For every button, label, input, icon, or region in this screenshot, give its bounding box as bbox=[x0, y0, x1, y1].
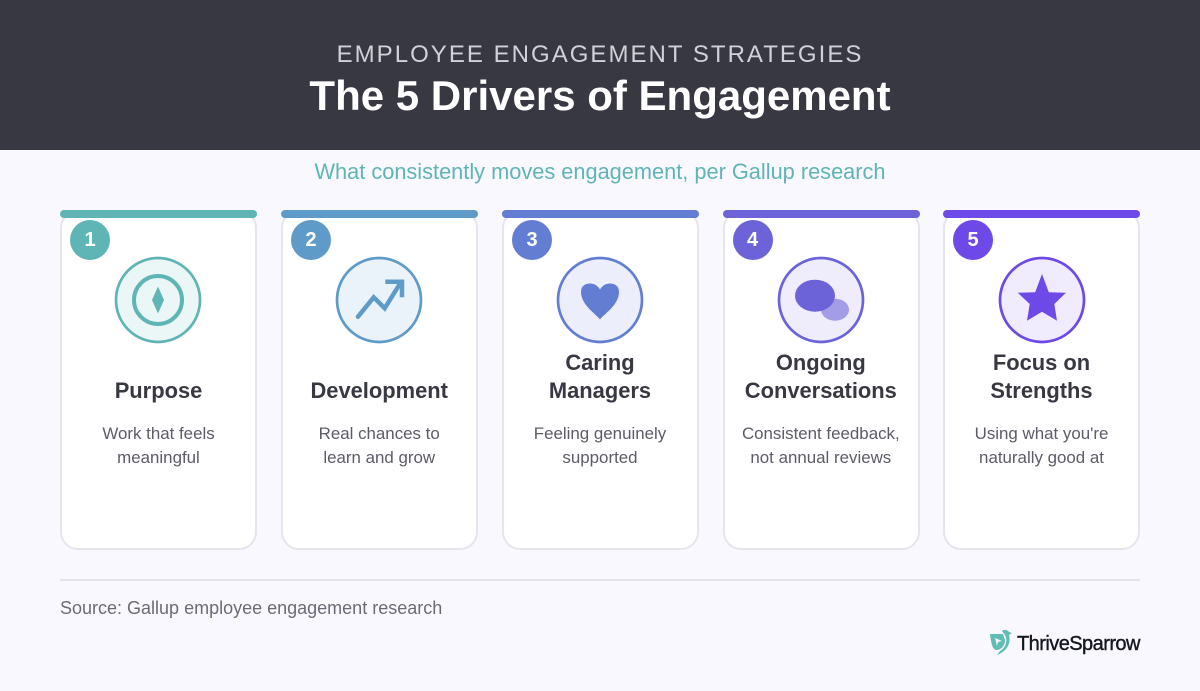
heading: Ongoing bbox=[776, 350, 866, 375]
icon: growth arrow bbox=[336, 256, 422, 344]
source note: Source: Gallup employee engagement research bbox=[60, 598, 442, 618]
description: Using what you're bbox=[975, 424, 1108, 443]
number badge 2: 2 bbox=[305, 229, 317, 251]
subtitle: What consistently moves engagement, per Gallup research bbox=[314, 159, 886, 184]
number badge 2 bbox=[291, 220, 331, 260]
description bbox=[975, 424, 1108, 467]
description: Feeling genuinely bbox=[534, 424, 666, 443]
icon: compass bbox=[114, 256, 202, 344]
heading: Managers bbox=[549, 378, 651, 403]
card body bbox=[281, 210, 478, 550]
number badge 5 bbox=[953, 220, 993, 260]
description: Consistent feedback, bbox=[742, 424, 900, 443]
icon: sparrow mark bbox=[990, 630, 1012, 655]
heading bbox=[990, 350, 1093, 403]
heading: Strengths bbox=[990, 378, 1093, 403]
number badge 4: 4 bbox=[747, 229, 758, 251]
heading: Caring bbox=[565, 350, 635, 375]
description: not annual reviews bbox=[750, 448, 891, 467]
card body bbox=[723, 210, 920, 550]
icon: star bbox=[998, 256, 1086, 344]
eyebrow heading: EMPLOYEE ENGAGEMENT STRATEGIES bbox=[337, 41, 863, 68]
description: meaningful bbox=[117, 448, 200, 467]
accent bar bbox=[723, 210, 920, 218]
heading bbox=[549, 350, 651, 403]
number badge 3 bbox=[512, 220, 552, 260]
panel: purpose bbox=[60, 210, 257, 550]
number badge 4 bbox=[732, 220, 772, 260]
card body bbox=[60, 210, 257, 550]
description bbox=[319, 424, 440, 467]
panel: caring managers bbox=[502, 210, 699, 550]
heading: Focus on bbox=[993, 350, 1090, 375]
description: learn and grow bbox=[323, 448, 435, 467]
heading: Purpose bbox=[115, 378, 202, 403]
icon: speech bubbles bbox=[778, 256, 864, 344]
number badge 3: 3 bbox=[526, 229, 538, 251]
accent bar bbox=[943, 210, 1140, 218]
description: Real chances to bbox=[319, 424, 440, 443]
panel: ongoing conversations bbox=[723, 210, 920, 550]
accent bar bbox=[60, 210, 257, 218]
panel: development bbox=[281, 210, 478, 550]
heading: Development bbox=[310, 378, 448, 403]
number badge 1 bbox=[70, 220, 110, 260]
accent bar bbox=[281, 210, 478, 218]
card body bbox=[943, 210, 1140, 550]
description: Work that feels bbox=[102, 424, 215, 443]
heading bbox=[745, 350, 897, 403]
accent bar bbox=[502, 210, 699, 218]
wordmark: ThriveSparrow bbox=[1017, 633, 1140, 655]
description: supported bbox=[562, 448, 638, 467]
logo: ThriveSparrow bbox=[990, 630, 1141, 655]
header band bbox=[0, 0, 1200, 150]
description: naturally good at bbox=[979, 448, 1104, 467]
heading: Conversations bbox=[745, 378, 897, 403]
description bbox=[534, 424, 666, 467]
panel: focus on strengths bbox=[943, 210, 1140, 550]
title: The 5 Drivers of Engagement bbox=[309, 72, 891, 119]
description bbox=[742, 424, 900, 467]
number badge 1: 1 bbox=[84, 229, 96, 251]
description bbox=[102, 424, 215, 467]
number badge 5: 5 bbox=[967, 229, 979, 251]
card body bbox=[502, 210, 699, 550]
icon: heart bbox=[556, 256, 644, 344]
